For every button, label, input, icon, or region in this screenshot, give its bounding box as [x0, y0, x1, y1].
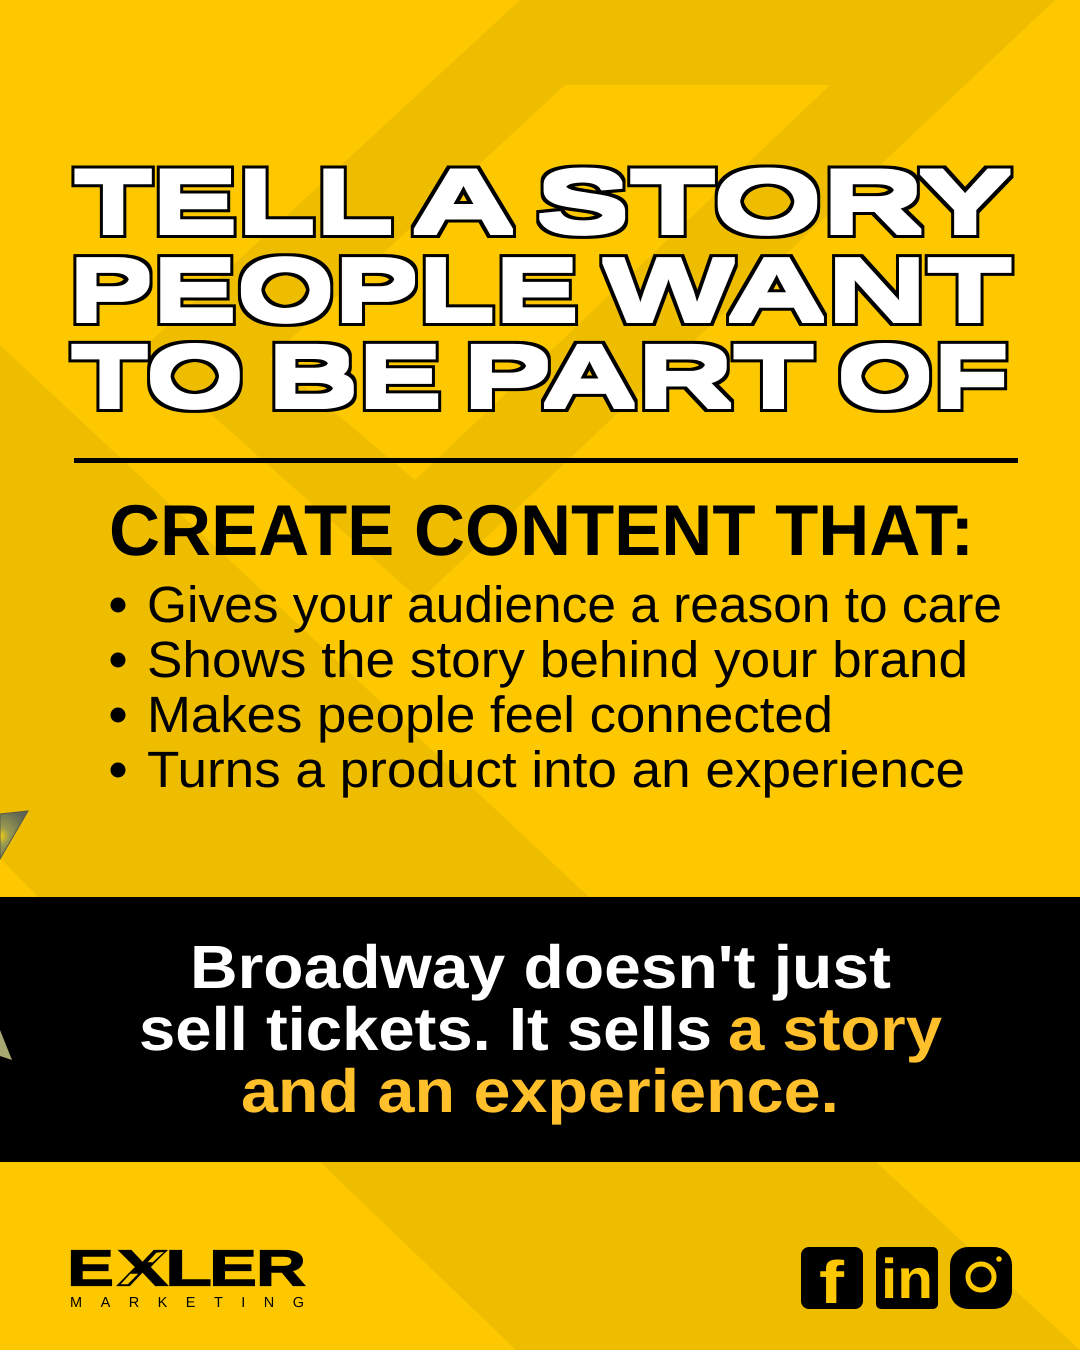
bullet list: Shows the story behind your brand	[147, 631, 968, 688]
callout text: and an experience.	[241, 1057, 839, 1125]
logo: Exler Marketing: X	[117, 1240, 168, 1296]
subheading: CREATE CONTENT THAT:	[109, 491, 974, 571]
logo: Exler Marketing: MARKETING	[70, 1295, 304, 1311]
icon: instagram	[950, 1247, 1012, 1309]
title: STORY	[536, 152, 1012, 251]
callout text: sell tickets. It sells	[139, 995, 712, 1063]
logo: Exler Marketing: R	[256, 1240, 306, 1296]
bullet list: Gives your audience a reason to care	[147, 576, 1002, 633]
callout text: a story	[728, 995, 942, 1063]
title: A	[411, 152, 516, 251]
title: PEOPLE	[69, 242, 579, 339]
icon: facebook: f	[819, 1249, 845, 1316]
title: PART	[463, 329, 814, 425]
divider	[74, 458, 1018, 463]
callout text: Broadway doesn't just	[190, 933, 891, 1001]
bullet list: Makes people feel connected	[147, 686, 833, 743]
callout band	[0, 897, 1080, 1162]
title: WANT	[603, 242, 1012, 339]
title: TO	[71, 329, 244, 425]
star fragment, lower	[0, 1030, 12, 1060]
icon: facebook	[801, 1247, 863, 1316]
icon: linkedin: in	[881, 1247, 933, 1310]
callout text	[139, 933, 942, 1125]
bullet list: Turns a product into an experience	[147, 741, 965, 798]
title	[69, 152, 1012, 425]
logo: Exler Marketing: E	[209, 1240, 257, 1296]
title: OF	[837, 329, 1009, 425]
title: TELL	[74, 152, 394, 251]
logo: Exler Marketing: L	[165, 1240, 212, 1296]
logo: Exler Marketing: E	[67, 1240, 114, 1296]
star fragment, upper	[0, 811, 28, 859]
bullet list	[110, 576, 1002, 798]
logo: Exler Marketing	[67, 1240, 306, 1311]
title: BE	[268, 329, 442, 425]
